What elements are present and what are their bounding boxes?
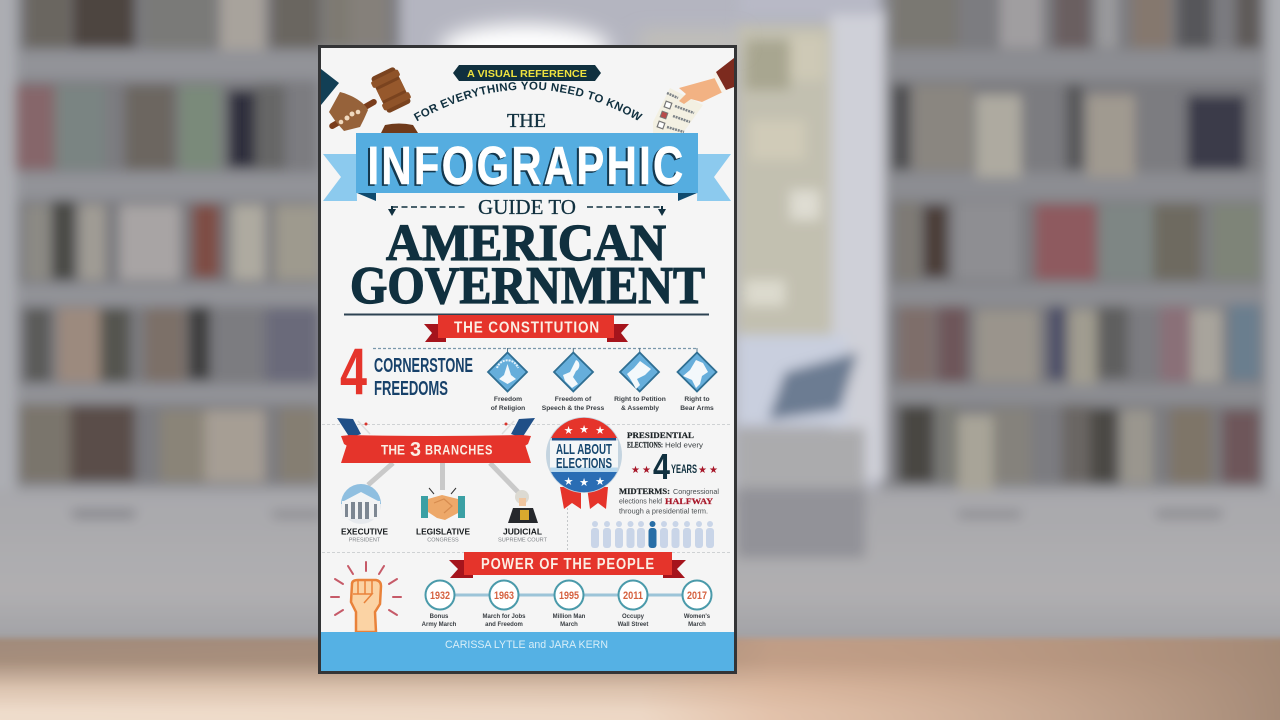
text block: presidential elections: 4 xyxy=(653,446,670,487)
timeline: marches: March xyxy=(560,622,578,628)
pictogram: row of voters xyxy=(591,521,714,548)
timeline: marches: 2011 xyxy=(623,590,643,602)
freedom labels: Right to Petition xyxy=(614,396,666,403)
heading: guide to with arrows: GUIDE TO xyxy=(478,195,576,219)
icon: hand on ballot xyxy=(653,58,734,133)
timeline: marches: Wall Street xyxy=(618,622,648,628)
icon: raised fist with rays xyxy=(331,562,401,632)
timeline: marches: 1932 xyxy=(430,590,450,602)
text block: midterms: elections held xyxy=(619,498,662,506)
text block: midterms: HALFWAY xyxy=(665,497,713,506)
heading: infographic: INFOGRAPHIC xyxy=(368,136,686,196)
text block: presidential elections: PRESIDENTIAL xyxy=(627,431,694,440)
freedom labels: Right to xyxy=(684,396,710,403)
icon: gavel in hand xyxy=(321,65,418,133)
heading: the: THE xyxy=(507,110,546,132)
heading: guide to with arrows xyxy=(388,195,666,219)
text block: midterms: MIDTERMS: xyxy=(619,487,670,496)
branch labels: JUDICIAL xyxy=(503,528,542,536)
timeline: marches: Occupy xyxy=(622,614,645,620)
heading: cornerstone freedoms: FREEDOMS xyxy=(374,378,448,400)
banner: the 3 branches: 3 xyxy=(410,439,421,461)
arched subtitle: FOR EVERYTHING YOU NEED TO KNOW xyxy=(414,82,643,122)
text block: presidential elections: Held every xyxy=(665,440,703,450)
icon: eagle wings and pennants xyxy=(337,418,535,447)
right shelves xyxy=(892,0,958,48)
heading: cornerstone freedoms: CORNERSTONE xyxy=(374,355,473,377)
section: the 3 branches xyxy=(337,418,548,544)
timeline: marches: Bonus xyxy=(430,614,449,620)
window and column xyxy=(830,10,884,480)
badge: all about elections: ★ xyxy=(595,476,605,488)
label smudges xyxy=(72,510,135,518)
badge: all about elections: ALL ABOUT xyxy=(556,441,612,458)
banner: power of the people xyxy=(449,552,686,578)
freedom labels: Bear Arms xyxy=(680,405,714,412)
timeline: marches: March xyxy=(688,622,706,628)
icon: speech diamond xyxy=(554,348,593,392)
freedom labels: of Religion xyxy=(491,405,525,412)
banner: the 3 branches: BRANCHES xyxy=(425,442,493,458)
banner: power of the people: POWER OF THE PEOPLE xyxy=(481,556,655,573)
branch labels: LEGISLATIVE xyxy=(416,528,471,536)
badge: all about elections xyxy=(546,417,622,509)
text block: presidential elections: ★★ xyxy=(698,465,718,476)
badge: a visual reference: A VISUAL REFERENCE xyxy=(467,68,587,80)
freedom labels: Freedom xyxy=(494,396,522,403)
badge: all about elections: ★ xyxy=(564,476,574,488)
freedom labels: & Assembly xyxy=(621,405,659,412)
timeline: marches: Army March xyxy=(422,622,457,628)
icon: religion diamond xyxy=(488,348,527,392)
text block: midterms: through a presidential term. xyxy=(619,508,708,516)
footer: authors: CARISSA LYTLE and JARA KERN xyxy=(445,639,608,651)
badge: all about elections: ★ xyxy=(579,424,589,436)
branch labels: EXECUTIVE xyxy=(341,528,389,536)
icon: petition diamond xyxy=(620,348,659,392)
branch labels: CONGRESS xyxy=(427,538,459,544)
top of window xyxy=(740,0,880,15)
freedom labels: Freedom of xyxy=(555,396,592,403)
freedom labels xyxy=(491,396,714,412)
icon: executive building xyxy=(341,484,381,524)
text block: midterms: Congressional xyxy=(673,489,719,496)
timeline: marches: 1995 xyxy=(559,590,579,602)
heading: infographic: INFOGRAPHIC xyxy=(366,138,684,198)
badge: all about elections: ★ xyxy=(579,477,589,489)
banner: the constitution: THE CONSTITUTION xyxy=(454,320,600,336)
timeline: marches: Million Man xyxy=(553,614,586,620)
blue ribbon with title xyxy=(323,133,731,201)
banner: the 3 branches: THE xyxy=(381,442,405,458)
timeline: marches: March for Jobs xyxy=(482,614,526,620)
heading: american government: AMERICAN xyxy=(386,215,666,272)
left shelves xyxy=(25,0,70,48)
heading: cornerstone freedoms xyxy=(374,355,473,400)
numeral 4: 4 xyxy=(340,334,367,408)
badge: all about elections: ★ xyxy=(564,425,574,437)
icon: legislative handshake xyxy=(421,488,465,520)
book cover xyxy=(318,45,737,674)
icon: bear arms diamond xyxy=(678,348,716,392)
ribbons xyxy=(560,487,608,509)
timeline: marches: and Freedom xyxy=(485,622,523,628)
connector lines xyxy=(368,463,518,492)
banner: the constitution xyxy=(424,315,629,342)
text block: presidential elections: YEARS xyxy=(671,464,697,476)
timeline: marches xyxy=(422,580,712,628)
branch labels xyxy=(341,528,548,544)
branch labels: SUPREME COURT xyxy=(498,538,548,544)
text block: midterms xyxy=(619,487,719,516)
badge: all about elections: ELECTIONS xyxy=(556,455,612,472)
timeline: marches: Women's xyxy=(684,614,711,620)
timeline: marches: 1963 xyxy=(494,590,514,602)
banner: the 3 branches xyxy=(341,435,531,463)
footer: authors xyxy=(321,632,734,671)
heading: american government: GOVERNMENT xyxy=(350,257,705,315)
freedom labels: Speech & the Press xyxy=(542,405,604,412)
shelf openings xyxy=(18,0,1262,484)
section: 4 cornerstone freedoms xyxy=(340,334,716,412)
badge: a visual reference xyxy=(453,65,601,81)
branch labels: PRESIDENT xyxy=(349,538,381,544)
badge: all about elections: ★ xyxy=(595,425,605,437)
text block: presidential elections: ELECTIONS: xyxy=(627,440,663,450)
text block: presidential elections: ★★ xyxy=(631,465,651,476)
text block: presidential elections xyxy=(627,431,718,487)
icon: judicial judge xyxy=(508,490,538,523)
heading: american government xyxy=(350,215,705,315)
timeline: marches: 2017 xyxy=(687,590,707,602)
